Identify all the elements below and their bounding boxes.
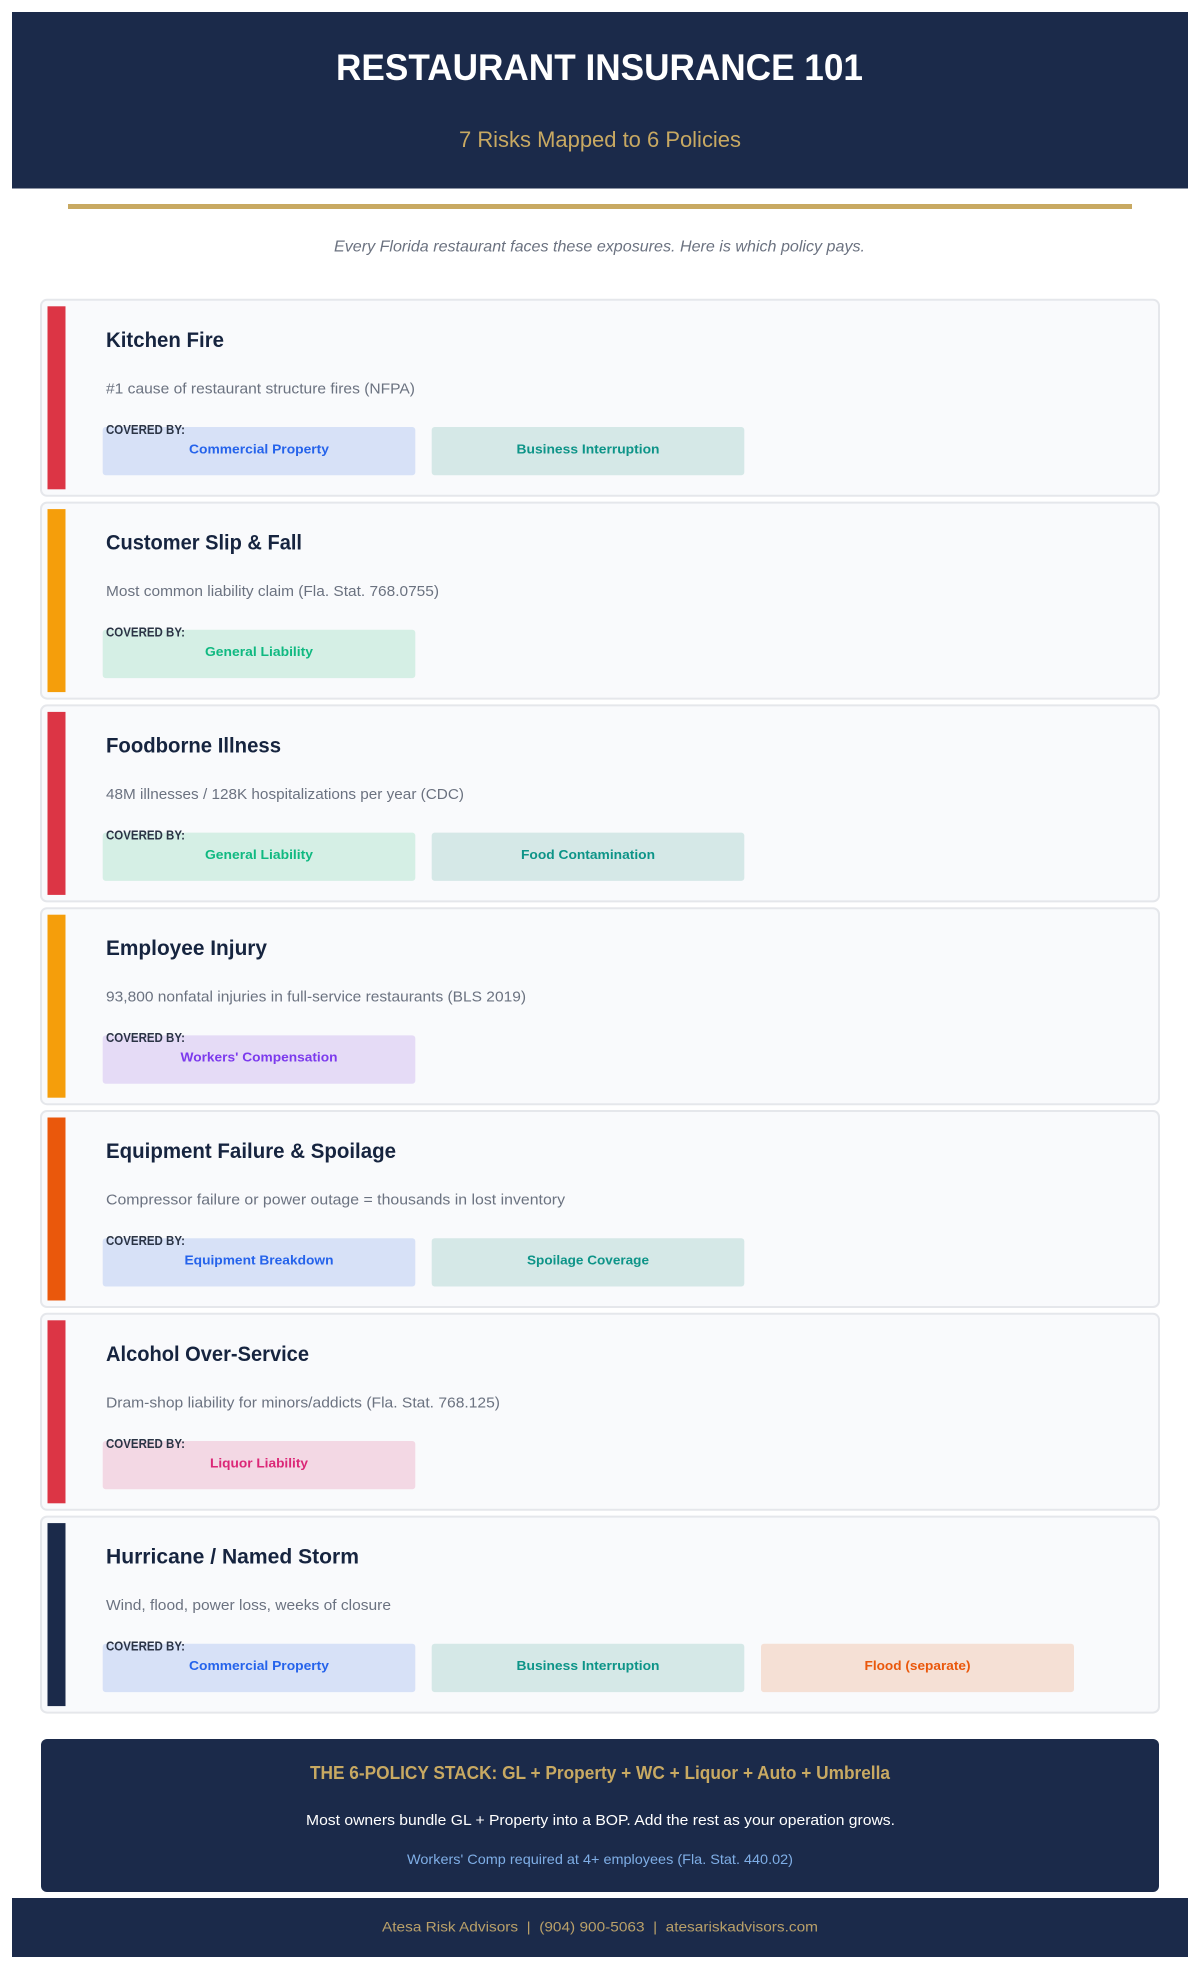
header banner xyxy=(12,12,1188,188)
covered by label: COVERED BY: xyxy=(106,1436,185,1451)
severity bar xyxy=(48,1523,66,1706)
panel: kitchen fire xyxy=(41,300,1159,496)
risk description: Most common liability claim (Fla. Stat. 768.0755) xyxy=(106,583,439,600)
panel: alcohol over-service xyxy=(41,1314,1159,1510)
panel: hurricane / named storm xyxy=(41,1517,1159,1713)
covered by label: COVERED BY: xyxy=(106,1639,185,1654)
panel: customer slip and fall xyxy=(41,503,1159,699)
severity bar xyxy=(48,306,66,489)
covered by label: COVERED BY: xyxy=(106,625,185,640)
policy pill: general liability: General Liability xyxy=(205,847,314,862)
policy pill: business interruption xyxy=(432,427,744,475)
title: RESTAURANT INSURANCE 101 xyxy=(336,46,863,88)
subtitle: 7 Risks Mapped to 6 Policies xyxy=(459,127,741,152)
risk name: Kitchen Fire xyxy=(106,329,224,352)
footer xyxy=(12,1898,1188,1957)
policy pill: workers compensation xyxy=(103,1035,415,1084)
risk name: Equipment Failure & Spoilage xyxy=(106,1140,396,1163)
panel: equipment failure and spoilage xyxy=(41,1111,1159,1307)
policy pill: food contamination: Food Contamination xyxy=(521,847,655,862)
severity bar xyxy=(48,1320,66,1503)
policy pill: flood: Flood (separate) xyxy=(864,1658,970,1673)
severity bar xyxy=(48,915,66,1098)
policy pill: spoilage coverage xyxy=(432,1238,744,1286)
risk description: Dram-shop liability for minors/addicts (Fla. Stat. 768.125) xyxy=(106,1394,500,1411)
panel: employee injury xyxy=(41,908,1159,1104)
tagline: Every Florida restaurant faces these exposures. Here is which policy pays. xyxy=(334,238,865,256)
summary heading: THE 6-POLICY STACK: GL + Property + WC + Liquor + Auto + Umbrella xyxy=(310,1763,891,1783)
covered by label: COVERED BY: xyxy=(106,1233,185,1248)
policy pill: commercial property: Commercial Property xyxy=(189,441,330,456)
covered by label: COVERED BY: xyxy=(106,422,185,437)
policy pill: commercial property xyxy=(103,427,415,475)
policy pill: flood xyxy=(761,1644,1074,1692)
risk name: Foodborne Illness xyxy=(106,734,281,757)
contact line: Atesa Risk Advisors | (904) 900-5063 | atesariskadvisors.com xyxy=(382,1918,818,1934)
policy pill: general liability xyxy=(103,833,415,881)
risk name: Hurricane / Named Storm xyxy=(106,1546,359,1569)
workers comp note: Workers' Comp required at 4+ employees (Fla. Stat. 440.02) xyxy=(407,1851,793,1867)
policy pill: commercial property xyxy=(103,1644,415,1692)
covered by label: COVERED BY: xyxy=(106,1030,185,1045)
policy pill: liquor liability xyxy=(103,1441,415,1489)
risk description: #1 cause of restaurant structure fires (NFPA) xyxy=(106,380,415,397)
risk description: Compressor failure or power outage = thousands in lost inventory xyxy=(106,1192,566,1208)
severity bar xyxy=(48,1118,66,1300)
summary panel: the 6-policy stack xyxy=(41,1739,1159,1892)
policy pill: equipment breakdown xyxy=(103,1238,415,1286)
policy pill: equipment breakdown: Equipment Breakdown xyxy=(184,1252,334,1268)
severity bar xyxy=(48,712,66,895)
policy pill: spoilage coverage: Spoilage Coverage xyxy=(527,1252,649,1268)
policy pill: general liability xyxy=(103,630,415,678)
risk name: Employee Injury xyxy=(106,937,267,960)
severity bar xyxy=(48,509,66,692)
policy pill: food contamination xyxy=(432,833,744,881)
summary text: Most owners bundle GL + Property into a BOP. Add the rest as your operation grows. xyxy=(306,1812,895,1829)
panel: foodborne illness xyxy=(41,705,1159,901)
policy pill: workers compensation: Workers' Compensation xyxy=(180,1050,338,1065)
covered by label: COVERED BY: xyxy=(106,827,185,842)
policy pill: business interruption: Business Interruption xyxy=(516,1658,660,1673)
risk name: Customer Slip & Fall xyxy=(106,532,302,555)
gold divider xyxy=(68,204,1132,209)
risk name: Alcohol Over-Service xyxy=(106,1343,309,1366)
risk description: 93,800 nonfatal injuries in full-service restaurants (BLS 2019) xyxy=(106,989,526,1006)
policy pill: business interruption: Business Interruption xyxy=(516,441,660,456)
risk description: Wind, flood, power loss, weeks of closure xyxy=(106,1597,391,1614)
risk description: 48M illnesses / 128K hospitalizations per year (CDC) xyxy=(106,786,464,803)
policy pill: general liability: General Liability xyxy=(205,644,314,659)
policy pill: liquor liability: Liquor Liability xyxy=(210,1455,309,1470)
policy pill: commercial property: Commercial Property xyxy=(189,1658,330,1673)
policy pill: business interruption xyxy=(432,1644,744,1692)
